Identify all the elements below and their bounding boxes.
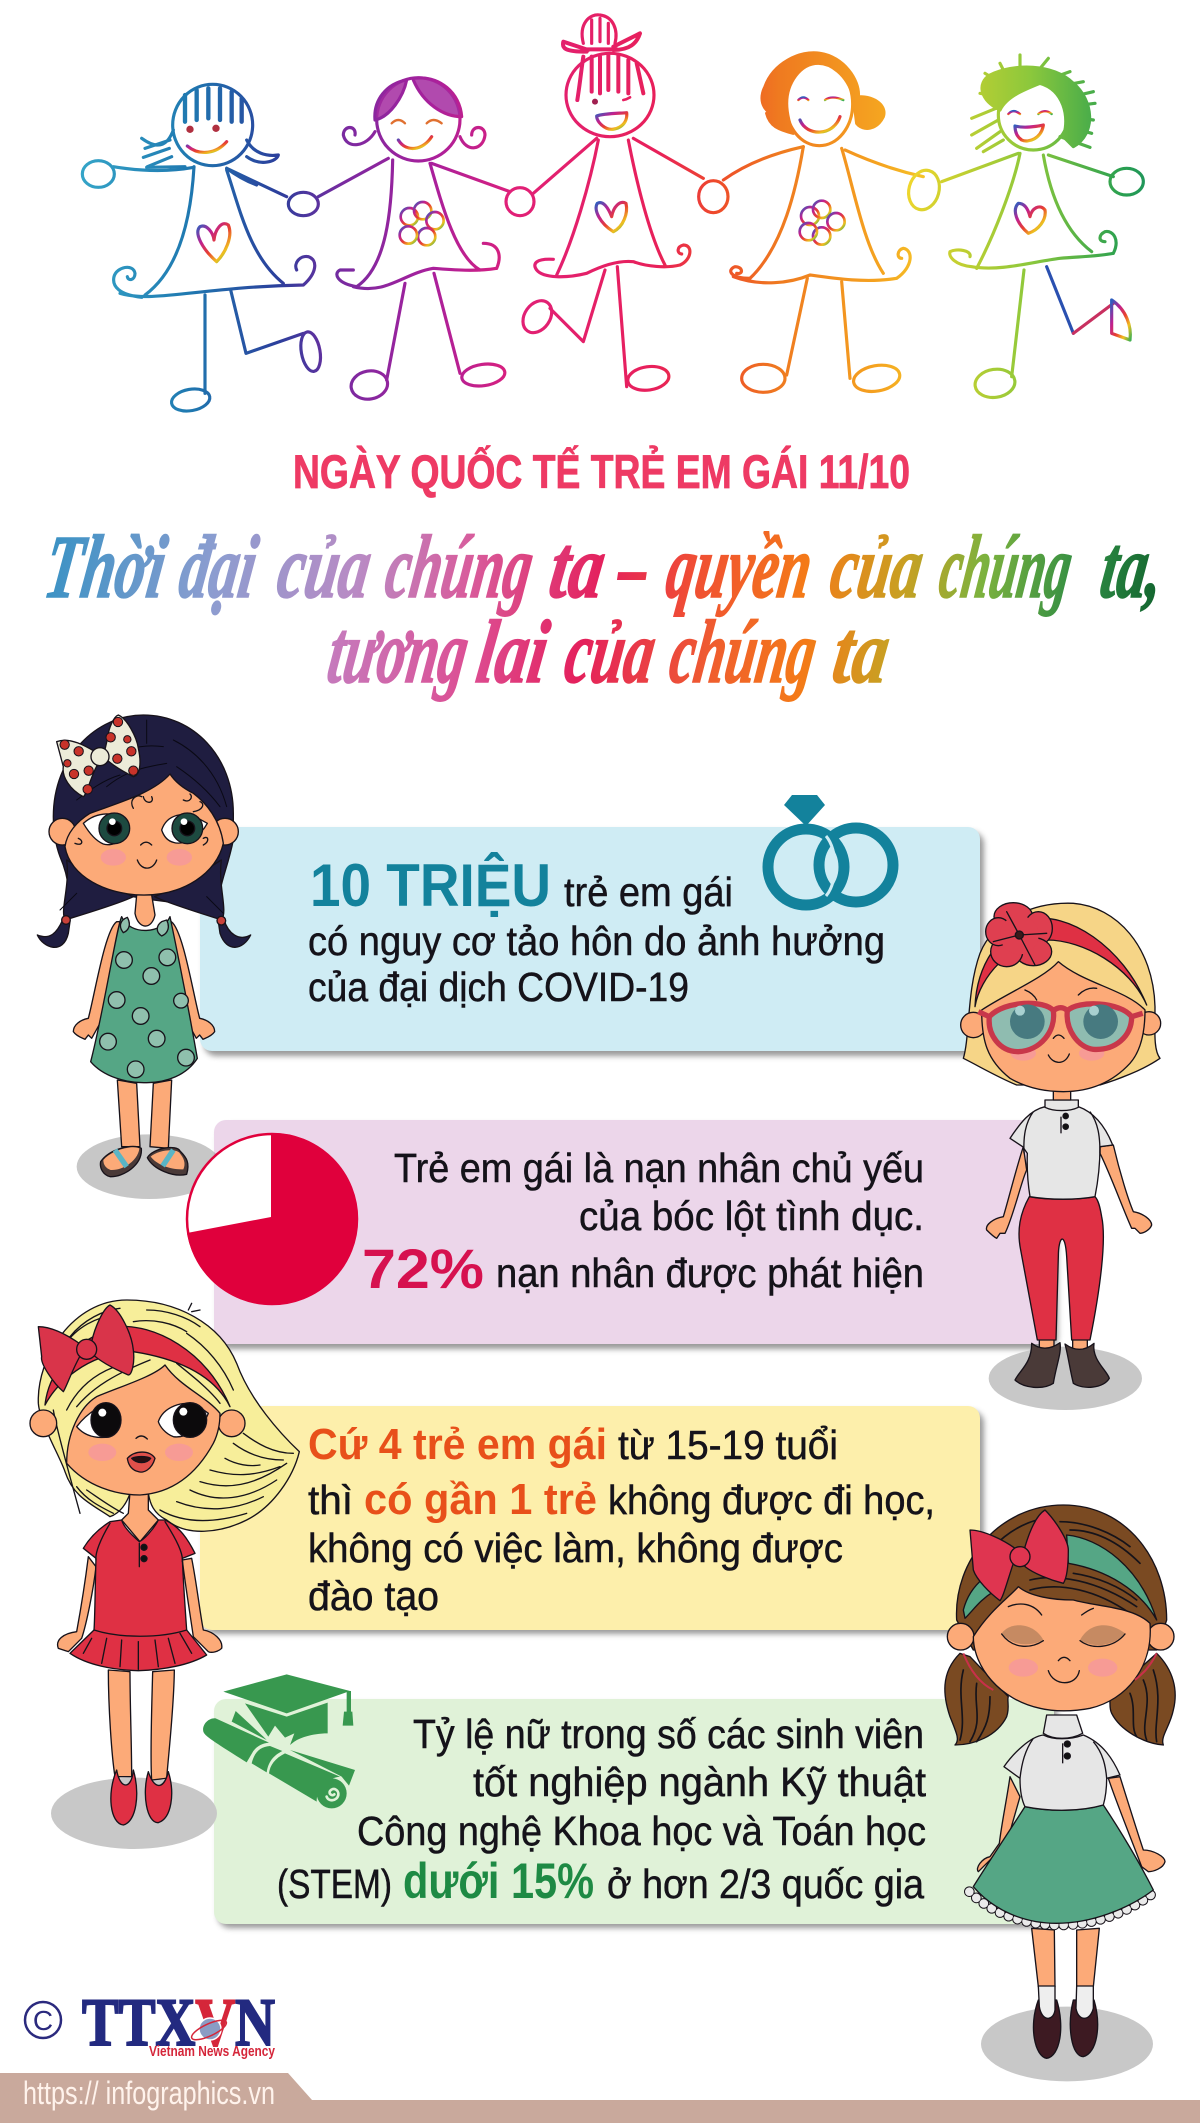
- bow: [970, 1510, 1068, 1601]
- text: STEM: [277, 1711, 927, 1909]
- text: four girls: Cứ 4 trẻ em gái: [308, 1420, 607, 1469]
- logo: TTXVN: Vietnam News Agency: [149, 2043, 276, 2060]
- text: victims: nạn nhân được phát hiện: [496, 1250, 924, 1296]
- text: victims: [394, 1145, 924, 1296]
- text: child marriage lines: có nguy cơ tảo hôn do ảnh hưởng: [308, 918, 885, 964]
- stat: 10 million: 10 TRIỆU: [310, 852, 551, 919]
- skirt: [969, 1805, 1153, 1925]
- title: NGÀY QUỐC TẾ TRẺ EM GÁI 11/10: [293, 445, 910, 498]
- shirt: [1010, 1100, 1113, 1199]
- arms: [58, 1557, 96, 1652]
- illustration: five children holding hands: [82, 15, 1143, 414]
- footer url: https:// infographics.vn: [23, 2075, 275, 2111]
- hair strands: [53, 1303, 293, 1520]
- slogan line 2: [322, 601, 896, 702]
- logo: copyright mark: C: [33, 2005, 53, 2036]
- ankles and boots: [1015, 1337, 1109, 1387]
- glasses: [978, 1003, 1143, 1052]
- girl 3: blonde in red dress: [30, 1300, 299, 1849]
- slogan line 2: tương: [322, 601, 475, 702]
- hair: [38, 1300, 299, 1531]
- dress: [70, 1520, 207, 1671]
- slogan line 2: ta: [827, 601, 896, 702]
- girl 1: polka dot dress: [37, 715, 251, 1199]
- arms: [73, 922, 120, 1039]
- text: child marriage lines: [308, 869, 885, 1010]
- text: four girls: đào tạo: [308, 1573, 439, 1619]
- text: four girls: từ 15-19 tuổi: [618, 1422, 838, 1468]
- pigtails: [945, 1653, 1008, 1745]
- panel: sexual exploitation: [214, 1120, 1058, 1349]
- text: STEM: dưới 15%: [403, 1853, 594, 1909]
- figures 1 and 2: [82, 78, 510, 414]
- slogan line 2: của: [559, 601, 662, 702]
- legs and sandals: [100, 1080, 188, 1177]
- pie chart: 72%: [187, 1133, 358, 1305]
- shirt: [1004, 1715, 1120, 1810]
- slogan line 1: chúng: [934, 516, 1079, 617]
- girl 2: glasses and red trousers: [961, 903, 1161, 1410]
- logo: copyright mark: [25, 2002, 61, 2038]
- text: STEM: Công nghệ Khoa học và Toán học: [357, 1808, 926, 1854]
- text: STEM: (STEM): [277, 1861, 392, 1907]
- headband: [45, 1326, 230, 1407]
- text: victims: của bóc lột tình dục.: [579, 1193, 924, 1239]
- ears: [961, 1012, 986, 1038]
- slogan line 1: chúng: [380, 516, 540, 617]
- text: STEM: ở hơn 2/3 quốc gia: [607, 1861, 924, 1907]
- ears: [947, 1623, 974, 1650]
- face: [65, 774, 223, 895]
- figure 5: green girl: [904, 55, 1143, 400]
- text: four girls: không được đi học,: [608, 1477, 935, 1523]
- hair dome: [956, 1505, 1167, 1650]
- ground shadow: [989, 1347, 1142, 1410]
- face: [982, 962, 1145, 1092]
- ground shadow: [77, 1134, 222, 1199]
- text: child marriage lines: của đại dịch COVID-19: [308, 964, 689, 1010]
- headband: [963, 1535, 1157, 1690]
- figure 4: orange girl: [699, 53, 923, 395]
- slogan line 1: của: [825, 516, 930, 617]
- icon: wedding rings: [768, 795, 893, 905]
- figures 3 and 4: [506, 15, 923, 395]
- panel: child marriage: [200, 795, 984, 1056]
- hair: [37, 715, 251, 947]
- icon: graduation cap and diploma: [203, 1674, 355, 1808]
- text: STEM: Tỷ lệ nữ trong số các sinh viên: [413, 1711, 924, 1757]
- face: [67, 1365, 220, 1495]
- text: four girls: thì: [308, 1477, 353, 1523]
- slogan line 1: đại: [174, 516, 264, 617]
- face: [973, 1587, 1150, 1711]
- bow: [57, 715, 140, 797]
- slogan line 2: chúng: [664, 601, 823, 702]
- text: four girls: có gần 1 trẻ: [364, 1475, 597, 1524]
- text: STEM: tốt nghiệp ngành Kỹ thuật: [473, 1759, 927, 1805]
- text: four girls: không có việc làm, không được: [308, 1525, 843, 1571]
- figure 1: blue girl: [82, 84, 323, 414]
- slogan line 1: quyền: [661, 516, 819, 617]
- shoes: [111, 1770, 172, 1825]
- ground shadow: [981, 2007, 1153, 2081]
- logo: TTXVN: TTXVN: [82, 1984, 275, 2060]
- trousers: [1019, 1197, 1103, 1340]
- socks: [1038, 1986, 1093, 2018]
- slogan line 1: Thời: [39, 516, 173, 617]
- neck: [135, 895, 155, 926]
- panel: STEM graduates: [203, 1674, 1058, 1928]
- slogan line 1: của: [272, 516, 378, 617]
- bow: [38, 1305, 134, 1392]
- girl 4: brunette with green skirt: [945, 1505, 1175, 2081]
- headband and flower: [975, 903, 1147, 1007]
- dress: [91, 917, 197, 1083]
- arms: [977, 1777, 1020, 1872]
- text: victims: Trẻ em gái là nạn nhân chủ yếu: [394, 1145, 924, 1191]
- neck: [122, 1492, 158, 1542]
- hair: [963, 903, 1160, 1085]
- slogan line 1: ta,: [1095, 516, 1171, 617]
- figure 2: purple girl: [318, 78, 510, 402]
- slogan line 2: lai: [471, 601, 555, 702]
- panel: education and employment: [200, 1406, 984, 1634]
- ears: [49, 818, 76, 845]
- ground shadow: [51, 1778, 217, 1849]
- text: child marriage lines: trẻ em gái: [564, 869, 733, 915]
- text: four girls: [308, 1420, 935, 1619]
- footer band: [0, 2073, 1200, 2123]
- arms: [986, 1147, 1027, 1238]
- stat: 72%: 72%: [362, 1237, 484, 1300]
- ears: [30, 1410, 57, 1437]
- slogan line 1: [39, 516, 1171, 617]
- slogan line 1: ta: [544, 516, 612, 617]
- legs: [108, 1670, 174, 1780]
- figure 3: pink girl: [506, 15, 703, 393]
- shoes: [1033, 2000, 1098, 2058]
- slogan line 1: –: [612, 516, 655, 617]
- legs: [1032, 1928, 1099, 1987]
